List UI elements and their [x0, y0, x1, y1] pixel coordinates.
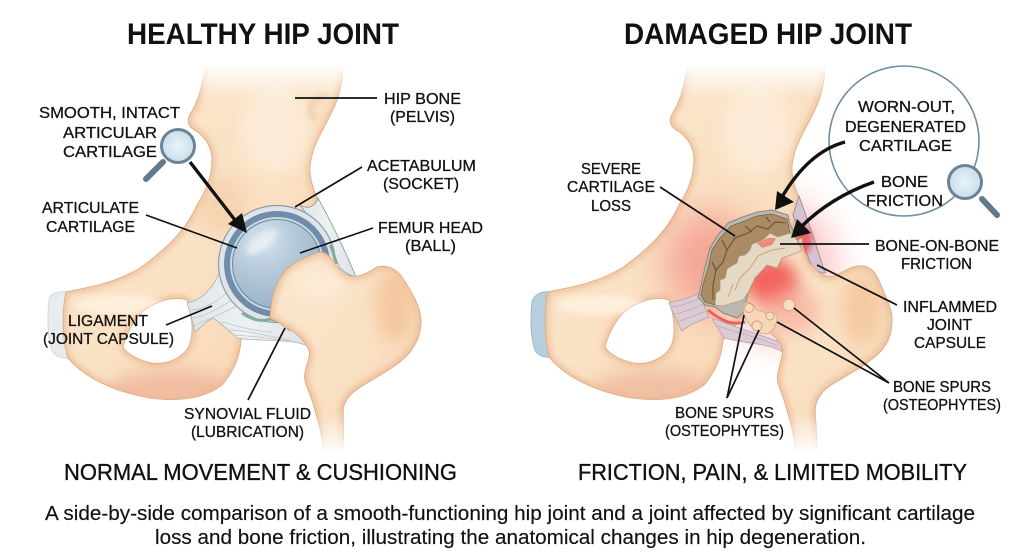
acetabulum (socket) ring — [218, 206, 336, 322]
inflammation glow: background — [720, 198, 836, 342]
exposed bone: red friction points — [757, 238, 776, 248]
label: ligament — [43, 313, 174, 348]
label: synovial fluid: SYNOVIAL FLUID — [184, 406, 311, 423]
label: bone spurs, right: BONE SPURS — [893, 379, 991, 396]
label: articulate cartilage: ARTICULATE — [42, 200, 139, 217]
label: worn-out, degenerated cartilage: CARTILAGE — [859, 138, 952, 155]
subheading: normal movement: NORMAL MOVEMENT & CUSHIONING — [64, 459, 457, 485]
fade: femur shaft bottom — [310, 412, 355, 460]
caption text — [45, 503, 975, 549]
label: smooth, intact articular cartilage: SMOOTH, INTACT — [39, 105, 180, 122]
label: severe cartilage loss: CARTILAGE — [567, 179, 655, 196]
label: hip bone: (PELVIS) — [390, 109, 455, 126]
synovial fluid — [242, 245, 337, 330]
label: articulate cartilage: CARTILAGE — [46, 219, 135, 236]
worn cartilage: grey outer layer — [698, 210, 802, 318]
icon: pelvis end cap — [531, 292, 553, 357]
bone spurs — [743, 299, 795, 334]
label: bone friction: BONE — [881, 174, 928, 191]
inflamed capsule: upper — [793, 196, 826, 273]
label: smooth, intact articular cartilage: CARTILAGE — [63, 144, 157, 161]
label: ligament: (JOINT CAPSULE) — [43, 331, 174, 348]
label: severe cartilage loss — [567, 161, 655, 215]
arrow: magnifier to cartilage — [190, 162, 247, 233]
panel: damaged hip joint illustration — [531, 58, 892, 460]
label: smooth, intact articular cartilage: ARTICULAR — [63, 125, 157, 142]
red rim below cartilage — [708, 310, 745, 323]
femur head (ball) — [230, 217, 324, 311]
exposed bone: inner cracks — [728, 248, 785, 297]
worn cartilage: cracks — [712, 217, 786, 300]
label: bone spurs, bottom: BONE SPURS — [675, 405, 774, 422]
caption text: loss and bone friction, illustrating the anatomical changes in hip degeneration. — [155, 527, 866, 549]
label: acetabulum — [367, 158, 476, 193]
articular cartilage ring — [224, 211, 330, 317]
label: worn-out, degenerated cartilage — [845, 99, 966, 155]
label: hip bone — [384, 91, 461, 126]
leader lines: damaged — [660, 187, 897, 398]
caption text: A side-by-side comparison of a smooth-functioning hip joint and a joint affected by significant cartilage — [45, 503, 975, 525]
fade: pelvis top — [672, 58, 837, 100]
label: synovial fluid: (LUBRICATION) — [191, 424, 304, 441]
inflamed capsule: lower left — [669, 293, 709, 331]
icon: magnifier, damaged — [948, 166, 997, 215]
label: bone-on-bone friction — [875, 238, 999, 273]
glow: red patch — [794, 226, 812, 254]
label: bone friction: FRICTION — [866, 193, 943, 210]
leader lines: healthy — [146, 98, 377, 400]
subheading: friction, pain: FRICTION, PAIN, & LIMITED MOBILITY — [578, 459, 967, 485]
icon: magnifier, healthy — [146, 130, 194, 179]
label: ligament: LIGAMENT — [68, 313, 148, 330]
label: inflamed joint capsule — [903, 299, 997, 352]
label: bone-on-bone friction: BONE-ON-BONE — [875, 238, 999, 255]
title: healthy hip joint: HEALTHY HIP JOINT — [127, 18, 399, 51]
label: hip bone: HIP BONE — [384, 91, 461, 108]
label: femur head: (BALL) — [405, 238, 456, 255]
fade: femur shaft bottom — [780, 412, 828, 460]
worn cartilage: brown layer — [701, 214, 790, 305]
label: bone spurs, bottom — [665, 405, 784, 440]
label: inflamed joint capsule: CAPSULE — [914, 335, 986, 352]
label: severe cartilage loss: SEVERE — [581, 161, 641, 178]
title: damaged hip joint: DAMAGED HIP JOINT — [624, 18, 912, 51]
label: severe cartilage loss: LOSS — [591, 198, 631, 215]
label: inflamed joint capsule: JOINT — [927, 317, 972, 334]
label: acetabulum: ACETABULUM — [367, 158, 476, 175]
femur — [744, 238, 892, 456]
label: bone-on-bone friction: FRICTION — [901, 256, 972, 273]
label: bone friction — [866, 174, 943, 210]
hip bone (pelvis) — [545, 60, 825, 406]
arrow: worn cartilage — [775, 142, 845, 210]
femur — [270, 252, 421, 456]
label: femur head: FEMUR HEAD — [378, 220, 483, 237]
label: femur head — [378, 220, 483, 255]
label: bone spurs, right: (OSTEOPHYTES) — [883, 397, 1001, 414]
label: inflamed joint capsule: INFLAMMED — [903, 299, 997, 316]
callout circle: worn-out cartilage — [829, 66, 979, 216]
label: worn-out, degenerated cartilage: WORN-OUT, — [858, 99, 955, 116]
icon: pelvis end cap — [48, 292, 70, 358]
label: bone spurs, right — [883, 379, 1001, 414]
inflamed capsule: lower right — [712, 318, 783, 352]
panel: healthy hip joint illustration — [48, 58, 421, 460]
label: worn-out, degenerated cartilage: DEGENERATED — [845, 119, 966, 136]
hip bone (pelvis) — [63, 60, 343, 406]
label: smooth, intact articular cartilage — [39, 105, 180, 161]
label: synovial fluid — [184, 406, 311, 441]
arrow: bone friction — [791, 182, 874, 238]
fade: pelvis top — [190, 58, 355, 100]
label: bone spurs, bottom: (OSTEOPHYTES) — [665, 423, 784, 440]
ligament (joint capsule) — [187, 198, 356, 346]
label: acetabulum: (SOCKET) — [383, 176, 459, 193]
label: articulate cartilage — [42, 200, 139, 236]
exposed bone: serrated crest — [715, 233, 802, 306]
